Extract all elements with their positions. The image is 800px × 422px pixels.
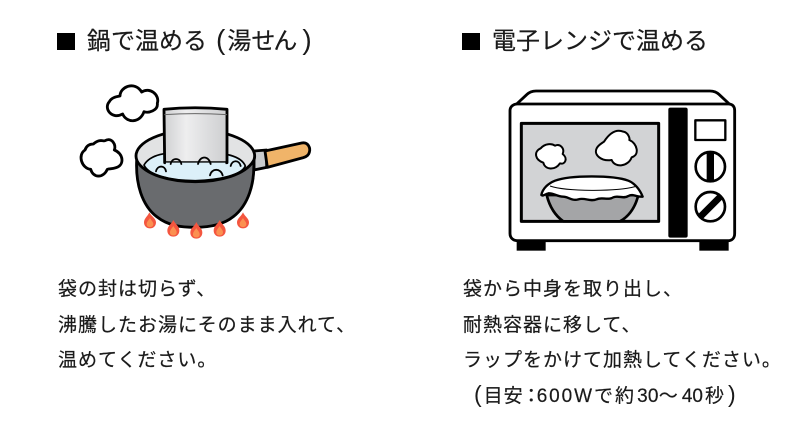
icon: display <box>695 120 725 140</box>
icon: water <box>144 152 245 181</box>
icon: water surface in front of pouch <box>165 163 226 167</box>
text block: pot instructions: 沸騰したお湯にそのまま入れて、 <box>58 315 356 336</box>
icon: pouch <box>164 108 227 163</box>
icon: square bullet left <box>57 33 75 50</box>
text block: pot instructions <box>58 278 356 371</box>
icon: bubbles <box>156 157 241 175</box>
text block: microwave instructions: ラップをかけて加熱してください。 <box>463 350 782 371</box>
text block: pot instructions: 温めてください。 <box>58 350 217 371</box>
icon: flames <box>144 212 249 239</box>
heading: pot method: 鍋で温める (湯せん) <box>87 24 312 55</box>
icon: door handle <box>668 108 688 238</box>
icon: steam left <box>536 144 566 169</box>
illustration: microwave oven <box>510 91 735 251</box>
text block: microwave time note: (目安：600Wで約30～40秒) <box>474 381 736 407</box>
icon: oven body <box>510 91 735 241</box>
icon: oven window <box>521 123 659 221</box>
icon: bowl <box>547 195 638 221</box>
icon: pot interior <box>136 130 255 182</box>
icon: steam right <box>596 131 637 165</box>
text block: microwave instructions <box>463 278 782 371</box>
icon: dial top <box>696 152 725 181</box>
heading: microwave method: 電子レンジで温める <box>492 28 708 55</box>
text block: pot instructions: 袋の封は切らず、 <box>58 279 216 300</box>
icon: plastic wrap <box>541 176 643 200</box>
text block: microwave instructions: 耐熱容器に移して、 <box>463 315 641 336</box>
icon: handle <box>254 143 310 170</box>
icon: square bullet right <box>462 33 480 50</box>
text block: microwave instructions: 袋から中身を取り出し、 <box>463 279 683 300</box>
icon: steam cloud left <box>81 140 122 176</box>
icon: dial bottom <box>696 192 725 221</box>
icon: feet <box>517 240 729 251</box>
icon: pot body <box>137 161 254 227</box>
icon: steam cloud top <box>107 86 158 121</box>
